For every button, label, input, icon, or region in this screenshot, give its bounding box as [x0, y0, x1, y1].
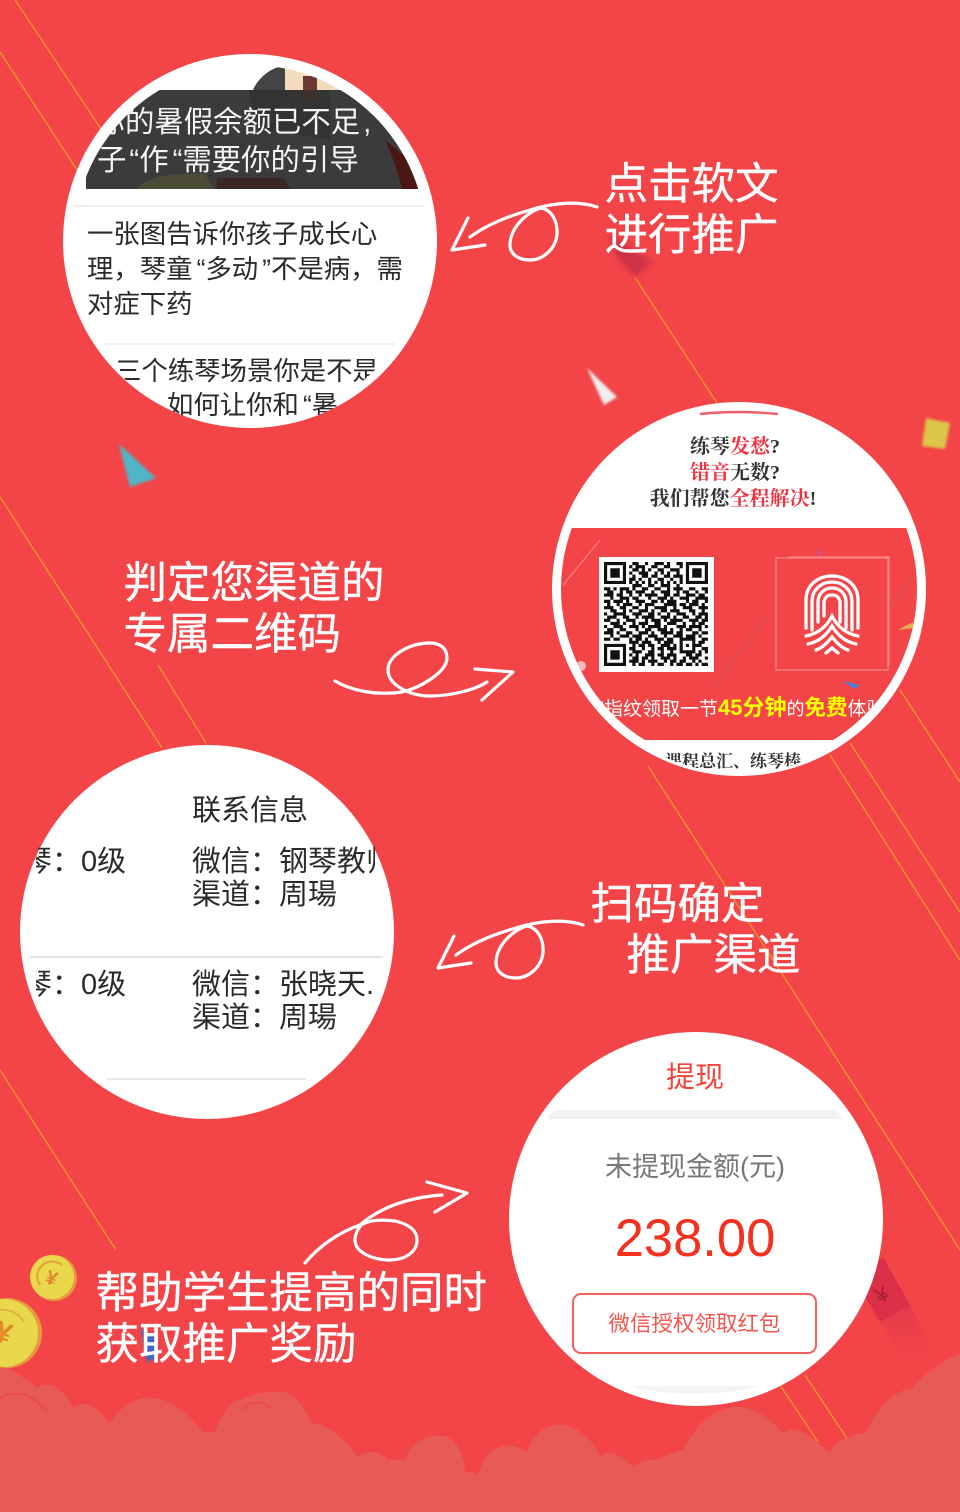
heading: scan to confirm: 推广渠道 [626, 932, 800, 980]
panel: article list circle [63, 54, 437, 428]
cropped footer text: 课程总汇、练琴棒 [665, 751, 801, 771]
article title one [87, 219, 403, 319]
red panel [555, 528, 925, 740]
heading: click article [604, 161, 778, 260]
contact records [36, 846, 375, 1030]
heading: channel QR: 专属二维码 [124, 611, 341, 659]
withdraw button: 微信授权领取红包 [608, 1312, 781, 1336]
article title two [118, 358, 376, 416]
contact records: 渠道：周瑒 [192, 878, 337, 911]
panel: contact information circle [0, 745, 395, 1119]
yellow square [922, 418, 950, 449]
cover caption [96, 106, 371, 177]
free lesson text: 按指纹领取一节45分钟的免费体验 [585, 695, 886, 720]
article cover image [86, 62, 421, 189]
headline: 练琴发愁? [690, 435, 780, 458]
arrow: to article circle [452, 203, 597, 260]
heading: click article: 点击软文 [604, 161, 778, 209]
red envelope: ¥ [870, 1280, 894, 1309]
heading: scan to confirm: 扫码确定 [590, 881, 764, 929]
QR code [599, 557, 714, 672]
headline [650, 435, 816, 510]
grey band [633, 1386, 757, 1394]
panel: QR code circle [552, 402, 926, 776]
contact records: 微信：钢琴教师 [192, 845, 395, 878]
arrow: to withdrawal circle [305, 1182, 467, 1263]
article title two: 如何让你和“暑 [167, 390, 338, 420]
article title two: 三个练琴场景你是不是 [115, 356, 379, 386]
divider [30, 956, 383, 958]
heading: scan to confirm [590, 881, 800, 980]
back cloud, right [905, 1353, 960, 1420]
red envelope [855, 1257, 932, 1365]
panel decorations [563, 540, 917, 690]
gold coins [0, 1255, 77, 1368]
grey band [547, 1110, 843, 1119]
red blur fragment [608, 232, 652, 278]
cloud shading [0, 1394, 270, 1412]
article title one: 一张图告诉你孩子成长心 [87, 219, 377, 249]
top rule [700, 412, 778, 414]
clouds [0, 1353, 960, 1512]
heading: earn rewards: 帮助学生提高的同时 [96, 1270, 487, 1318]
contact records: 渠道：周瑒 [192, 1001, 337, 1034]
fingerprint frame [776, 557, 889, 670]
blue fragment [141, 1328, 157, 1362]
contact heading: 联系信息 [192, 794, 308, 827]
contact records: 微信：张晓天. [192, 968, 374, 1001]
divider [104, 343, 395, 345]
panel: withdrawal circle [509, 1032, 883, 1406]
withdrawal title: 提现 [666, 1061, 724, 1094]
heading: click article: 进行推广 [604, 212, 778, 260]
confetti [119, 232, 950, 1362]
cover caption: 你的暑假余额已不足, [96, 106, 371, 139]
small coin: ¥ [42, 1267, 61, 1291]
balance label: 未提现金额(元) [605, 1152, 785, 1182]
heading: channel QR [124, 560, 384, 659]
heading: earn rewards [96, 1270, 487, 1369]
divider [74, 205, 424, 207]
cover caption: 子“作“需要你的引导 [97, 144, 359, 177]
white triangle [587, 368, 617, 405]
article title one: 对症下药 [87, 289, 193, 319]
cyan triangle [119, 444, 156, 487]
heading: channel QR: 判定您渠道的 [124, 560, 384, 608]
divider [107, 1078, 306, 1080]
arrow: to contact circle [438, 921, 583, 978]
front cloud band [0, 1363, 960, 1512]
headline: 我们帮您全程解决! [650, 487, 816, 510]
article title one: 理，琴童“多动”不是病，需 [87, 254, 403, 284]
arrow: to QR circle [335, 643, 513, 700]
withdraw button [573, 1294, 816, 1353]
heading: earn rewards: 获取推广奖励 [96, 1321, 356, 1369]
headline: 错音无数? [690, 461, 780, 484]
balance amount: 238.00 [615, 1209, 775, 1268]
fingerprint icon [806, 576, 858, 653]
